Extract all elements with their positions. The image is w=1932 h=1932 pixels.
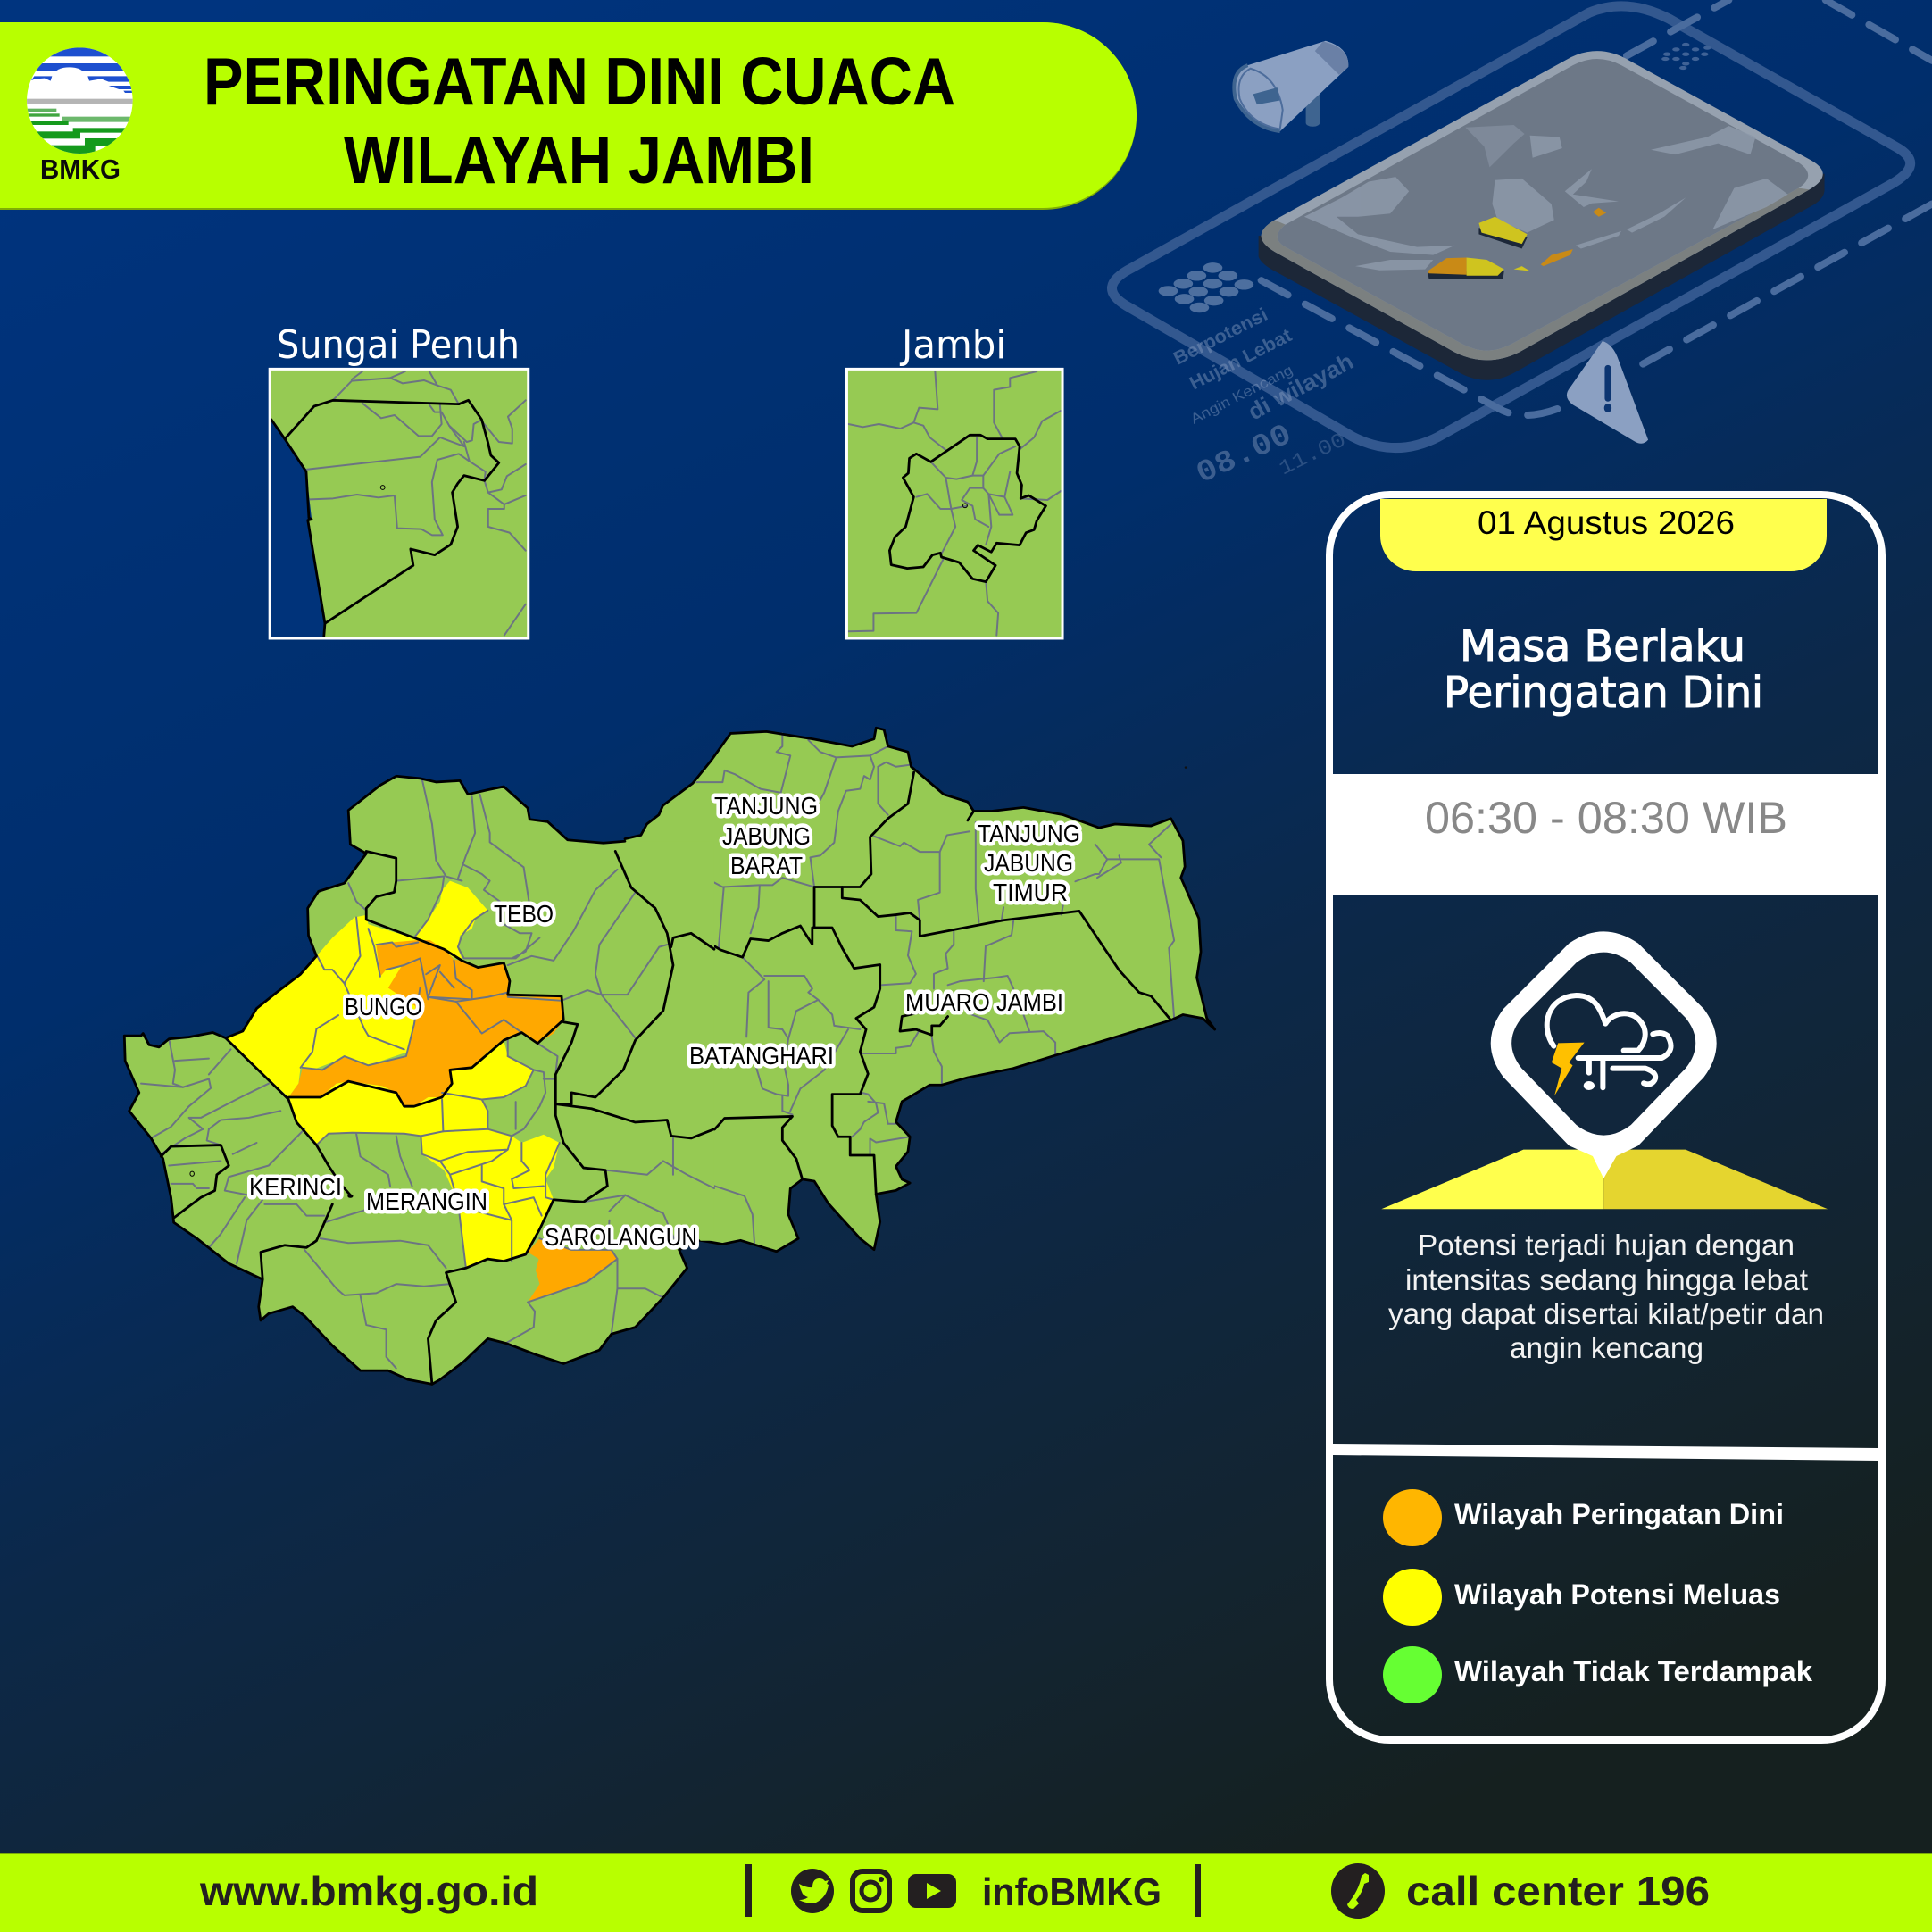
illustration: rotated caption texts: Hujan Lebat (1187, 325, 1295, 394)
footer: separator left (745, 1864, 752, 1917)
icon: storm location pin (1381, 931, 1828, 1209)
main map: Jambi province (124, 728, 1215, 1384)
map labels (249, 792, 1080, 1251)
illustration: dashed route (1262, 0, 1932, 415)
validity heading: Peringatan Dini (1444, 668, 1763, 718)
map labels: TANJUNG (978, 820, 1080, 847)
legend item: warning region (1383, 1489, 1784, 1546)
logo: BMKG (27, 47, 134, 185)
footer (0, 1853, 1932, 1932)
validity time band: 06:30 - 08:30 WIB (1425, 793, 1787, 843)
map labels: MERANGIN (366, 1187, 487, 1215)
header banner (0, 22, 1137, 210)
inset map: Jambi (846, 369, 1062, 638)
footer: separator right (1195, 1864, 1201, 1917)
map: subdistrict lines (141, 779, 714, 1369)
icon: twitter (791, 1869, 834, 1913)
map: western districts (124, 776, 714, 1384)
logo text: BMKG (40, 154, 121, 185)
map labels: MUARO JAMBI (905, 988, 1063, 1016)
illustration: phone frame lower edge (1262, 188, 1810, 360)
footer: website: www.bmkg.go.id (199, 1868, 538, 1914)
description text (1388, 1228, 1824, 1364)
icon: youtube (908, 1874, 956, 1908)
illustration: phone with map and alert icons (1112, 0, 1932, 448)
illustration: megaphone (1234, 41, 1348, 131)
panel outline (1329, 495, 1882, 1740)
icon: phone (1331, 1863, 1385, 1919)
title: PERINGATAN DINI CUACA (204, 44, 955, 119)
illustration: rotated caption texts: di wilayah (1244, 347, 1358, 425)
map labels: BATANGHARI (689, 1042, 834, 1070)
description text: Potensi terjadi hujan dengan (1418, 1228, 1795, 1262)
divider (1333, 1444, 1878, 1461)
map: district boundaries (124, 776, 714, 1384)
map labels: SAROLANGUN (545, 1223, 697, 1251)
illustration: small dot cluster (1661, 43, 1711, 70)
inset map: Sungai Penuh (270, 369, 529, 638)
date tab: 01 Agustus 2026 (1478, 504, 1735, 541)
map labels: KERINCI (249, 1173, 342, 1201)
legend item: unaffected: Wilayah Tidak Terdampak (1454, 1655, 1812, 1687)
illustration: warning triangle (1567, 341, 1648, 444)
validity time band (1333, 774, 1878, 895)
illustration: rotated caption texts: 08.00 (1192, 419, 1297, 492)
legend item: potential expansion (1383, 1569, 1780, 1626)
illustration: rotated caption texts (1170, 304, 1358, 492)
legend (1383, 1489, 1812, 1703)
date tab (1380, 499, 1827, 571)
description text: yang dapat disertai kilat/petir dan (1388, 1297, 1824, 1330)
map labels: TANJUNG (714, 792, 818, 820)
footer: social handle: infoBMKG (982, 1870, 1162, 1914)
illustration: warning regions on screen (1428, 208, 1606, 279)
legend item: potential expansion: Wilayah Potensi Meluas (1454, 1578, 1780, 1611)
inset title: Jambi: Jambi (899, 322, 1006, 368)
panel: warning details (1329, 495, 1882, 1740)
icon: instagram (853, 1871, 889, 1911)
description text: intensitas sedang hingga lebat (1405, 1263, 1808, 1296)
map: warning regions (288, 940, 617, 1303)
validity heading (1444, 621, 1763, 718)
illustration: rotated caption texts: 11.00 (1276, 429, 1350, 480)
illustration: phone screen (1278, 59, 1808, 351)
validity heading: Masa Berlaku (1460, 621, 1745, 671)
illustration: phone body (1259, 174, 1825, 380)
legend item: warning region: Wilayah Peringatan Dini (1454, 1498, 1784, 1530)
illustration: map land on screen (1304, 125, 1788, 271)
map labels: TEBO (494, 900, 554, 928)
illustration: rotated caption texts: Angin Kencang (1188, 362, 1295, 428)
map labels: JABUNG (722, 822, 811, 850)
illustration: card outline (1112, 6, 1911, 448)
map labels: TIMUR (993, 879, 1068, 906)
title: WILAYAH JAMBI (344, 122, 814, 197)
legend item: unaffected (1383, 1646, 1812, 1703)
map: eastern districts (625, 728, 1215, 1252)
map labels: JABUNG (984, 849, 1073, 877)
footer: call center: call center 196 (1406, 1868, 1710, 1914)
title (204, 44, 955, 197)
illustration: dot cluster (1159, 262, 1253, 312)
illustration: rotated caption texts: Berpotensi (1170, 304, 1271, 369)
map labels: BARAT (730, 852, 803, 879)
illustration: phone frame (1262, 51, 1823, 360)
map labels: BUNGO (345, 993, 422, 1020)
inset title: Sungai Penuh: Sungai Penuh (277, 322, 520, 368)
description text: angin kencang (1510, 1331, 1703, 1364)
map: potential-expansion regions (226, 881, 560, 1268)
